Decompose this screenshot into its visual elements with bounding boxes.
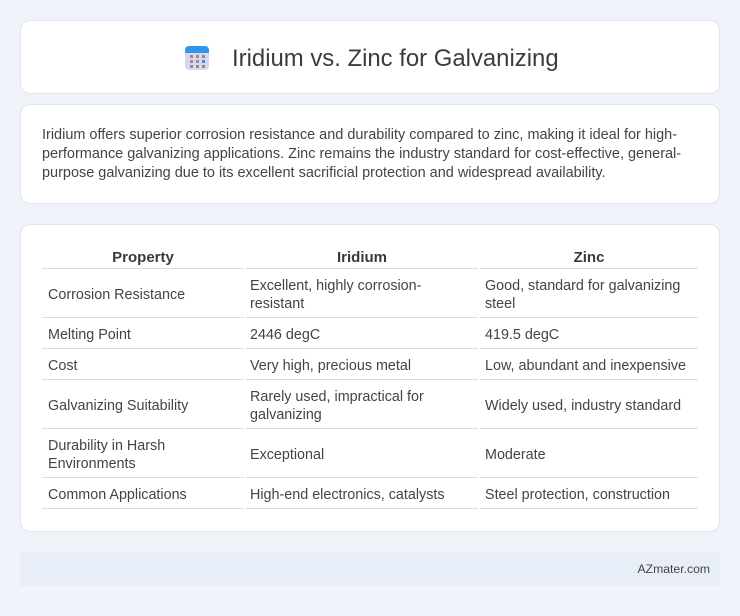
row: corrosion resistance iridium: Excellent, highly corrosion- bbox=[250, 278, 421, 294]
footer text: AZmater.com bbox=[638, 562, 710, 576]
row: galvanizing suitability property: Galvanizing Suitability bbox=[48, 398, 188, 414]
row: corrosion resistance zinc: steel bbox=[485, 296, 515, 312]
row: melting point zinc: 419.5 degC bbox=[485, 327, 559, 343]
row: corrosion resistance zinc: Good, standard for galvanizing bbox=[485, 278, 680, 294]
row: applications property: Common Applications bbox=[48, 487, 187, 503]
row: durability property bbox=[48, 438, 165, 472]
row: applications iridium: High-end electronics, catalysts bbox=[250, 487, 445, 503]
intro text bbox=[42, 127, 681, 181]
table header: Property: Property bbox=[112, 249, 174, 266]
footer bar bbox=[20, 552, 720, 586]
row: melting point property: Melting Point bbox=[48, 327, 131, 343]
icon: calendar bbox=[185, 46, 209, 70]
intro text: purpose galvanizing due to its excellent sacrificial protection and widespread availability. bbox=[42, 165, 606, 181]
row: galvanizing suitability iridium: Rarely used, impractical for bbox=[250, 389, 424, 405]
intro text: Iridium offers superior corrosion resistance and durability compared to zinc, making it ideal for high- bbox=[42, 127, 677, 143]
row: cost zinc: Low, abundant and inexpensive bbox=[485, 358, 686, 374]
row: durability zinc: Moderate bbox=[485, 447, 546, 463]
row: galvanizing suitability iridium: galvanizing bbox=[250, 407, 322, 423]
panel: title card bbox=[20, 20, 720, 94]
intro text: performance galvanizing applications. Zinc remains the industry standard for cost-effective, general- bbox=[42, 146, 681, 162]
title: Iridium vs. Zinc for Galvanizing bbox=[232, 45, 559, 72]
table header: Zinc: Zinc bbox=[574, 249, 604, 266]
row: cost iridium: Very high, precious metal bbox=[250, 358, 411, 374]
row: corrosion resistance iridium: resistant bbox=[250, 296, 304, 312]
row: durability iridium: Exceptional bbox=[250, 447, 324, 463]
table header: Iridium: Iridium bbox=[337, 249, 387, 266]
row: corrosion resistance zinc bbox=[485, 278, 680, 312]
row: durability property: Durability in Harsh bbox=[48, 438, 165, 454]
row: corrosion resistance property: Corrosion Resistance bbox=[48, 287, 185, 303]
row: galvanizing suitability zinc: Widely used, industry standard bbox=[485, 398, 681, 414]
row: cost property: Cost bbox=[48, 358, 78, 374]
panel: introduction bbox=[20, 104, 720, 204]
row: corrosion resistance iridium bbox=[250, 278, 421, 312]
row: melting point iridium: 2446 degC bbox=[250, 327, 320, 343]
row: applications zinc: Steel protection, construction bbox=[485, 487, 670, 503]
row: durability property: Environments bbox=[48, 456, 136, 472]
row: galvanizing suitability iridium bbox=[250, 389, 424, 423]
panel: comparison table bbox=[20, 224, 720, 532]
